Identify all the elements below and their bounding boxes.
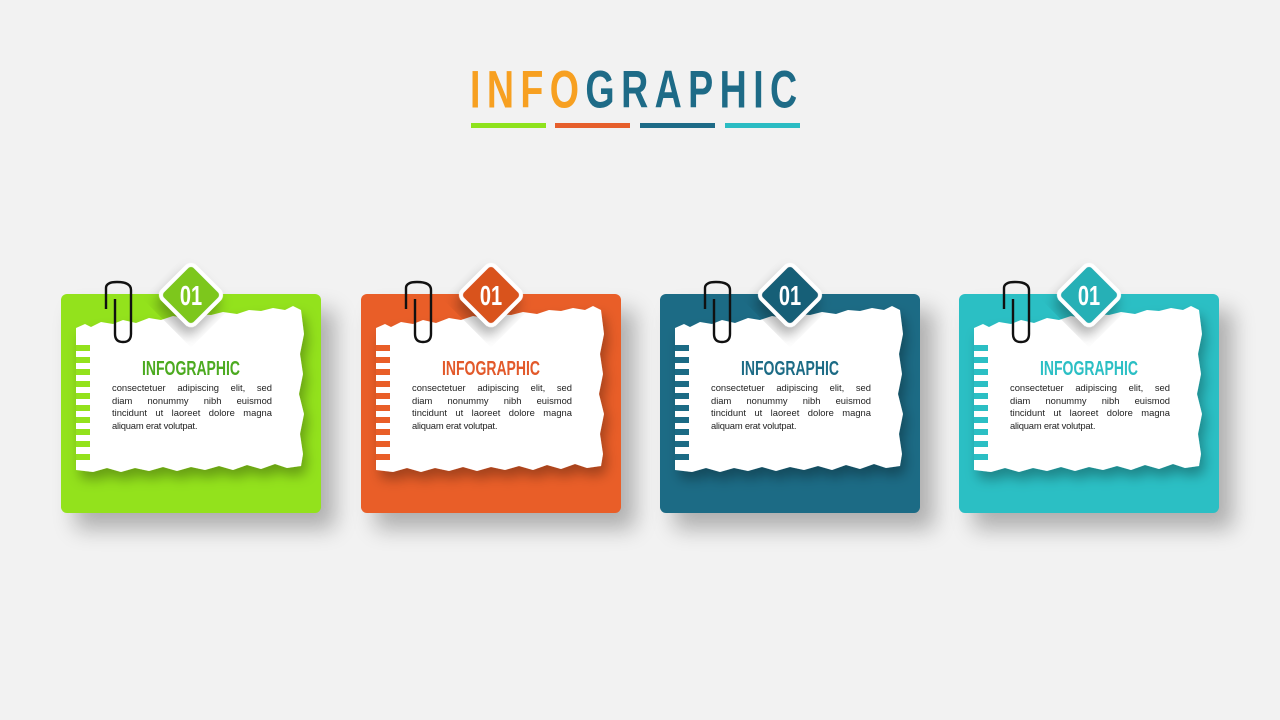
body text: adipiscing xyxy=(1075,382,1117,393)
body text: tincidunt xyxy=(112,407,147,418)
body text: adipiscing xyxy=(177,382,219,393)
body text: ut xyxy=(754,407,762,418)
body text: consectetuer xyxy=(412,382,466,393)
badge 01: 01 xyxy=(1078,281,1100,312)
body text: ut xyxy=(455,407,463,418)
badge 01: 01 xyxy=(180,281,202,312)
body text: dolore xyxy=(509,407,535,418)
body text: nibh xyxy=(803,395,820,406)
icon: paperclip xyxy=(1004,282,1029,342)
body text: diam xyxy=(112,395,132,406)
body text: laoreet xyxy=(172,407,200,418)
body text: consectetuer xyxy=(1010,382,1064,393)
icon: paperclip xyxy=(705,282,730,342)
heading: INFOGRAPHIC xyxy=(741,358,839,380)
icon: paperclip xyxy=(106,282,131,342)
body text: nonummy xyxy=(746,395,788,406)
body text: euismod xyxy=(836,395,871,406)
body text: nibh xyxy=(204,395,221,406)
body text: diam xyxy=(711,395,731,406)
body text: aliquam erat volutpat. xyxy=(711,420,796,431)
body text: magna xyxy=(243,407,272,418)
body text: euismod xyxy=(1135,395,1170,406)
body text: nonummy xyxy=(447,395,489,406)
body text: laoreet xyxy=(1070,407,1098,418)
body text: elit, xyxy=(1129,382,1143,393)
heading: INFOGRAPHIC xyxy=(1040,358,1138,380)
body text: ut xyxy=(1053,407,1061,418)
body text: aliquam erat volutpat. xyxy=(112,420,197,431)
body text: elit, xyxy=(231,382,245,393)
panel: card 1 green xyxy=(61,294,321,513)
body text: magna xyxy=(842,407,871,418)
torn paper xyxy=(76,306,304,472)
body text: dolore xyxy=(808,407,834,418)
body text: elit, xyxy=(531,382,545,393)
body text: sed xyxy=(1155,382,1170,393)
body text: euismod xyxy=(237,395,272,406)
badge 01 xyxy=(158,262,224,328)
body text: nonummy xyxy=(1045,395,1087,406)
body text xyxy=(1010,382,1170,431)
body text: dolore xyxy=(209,407,235,418)
badge 01 xyxy=(1056,262,1122,328)
body text: laoreet xyxy=(472,407,500,418)
body text: tincidunt xyxy=(412,407,447,418)
body text xyxy=(412,382,572,431)
body text: laoreet xyxy=(771,407,799,418)
body text xyxy=(112,382,272,431)
body text: diam xyxy=(412,395,432,406)
title: INFOGRAPHIC xyxy=(470,59,804,118)
badge 01 xyxy=(757,262,823,328)
body text: adipiscing xyxy=(477,382,519,393)
body text: sed xyxy=(856,382,871,393)
body text: consectetuer xyxy=(711,382,765,393)
body text: nibh xyxy=(1102,395,1119,406)
body text: aliquam erat volutpat. xyxy=(1010,420,1095,431)
body text: nibh xyxy=(504,395,521,406)
body text: ut xyxy=(155,407,163,418)
panel: card 2 orange xyxy=(361,294,621,513)
body text: euismod xyxy=(537,395,572,406)
badge 01: 01 xyxy=(779,281,801,312)
body text: magna xyxy=(543,407,572,418)
body text xyxy=(711,382,871,431)
body text: adipiscing xyxy=(776,382,818,393)
panel: card 3 teal xyxy=(660,294,920,513)
body text: sed xyxy=(257,382,272,393)
body text: tincidunt xyxy=(1010,407,1045,418)
body text: elit, xyxy=(830,382,844,393)
body text: nonummy xyxy=(147,395,189,406)
body text: sed xyxy=(557,382,572,393)
body text: aliquam erat volutpat. xyxy=(412,420,497,431)
heading: INFOGRAPHIC xyxy=(442,358,540,380)
badge 01 xyxy=(458,262,524,328)
body text: tincidunt xyxy=(711,407,746,418)
body text: dolore xyxy=(1107,407,1133,418)
heading: INFOGRAPHIC xyxy=(142,358,240,380)
body text: diam xyxy=(1010,395,1030,406)
panel: card 4 cyan xyxy=(959,294,1219,513)
icon: paperclip xyxy=(406,282,431,342)
body text: consectetuer xyxy=(112,382,166,393)
body text: magna xyxy=(1141,407,1170,418)
badge 01: 01 xyxy=(480,281,502,312)
